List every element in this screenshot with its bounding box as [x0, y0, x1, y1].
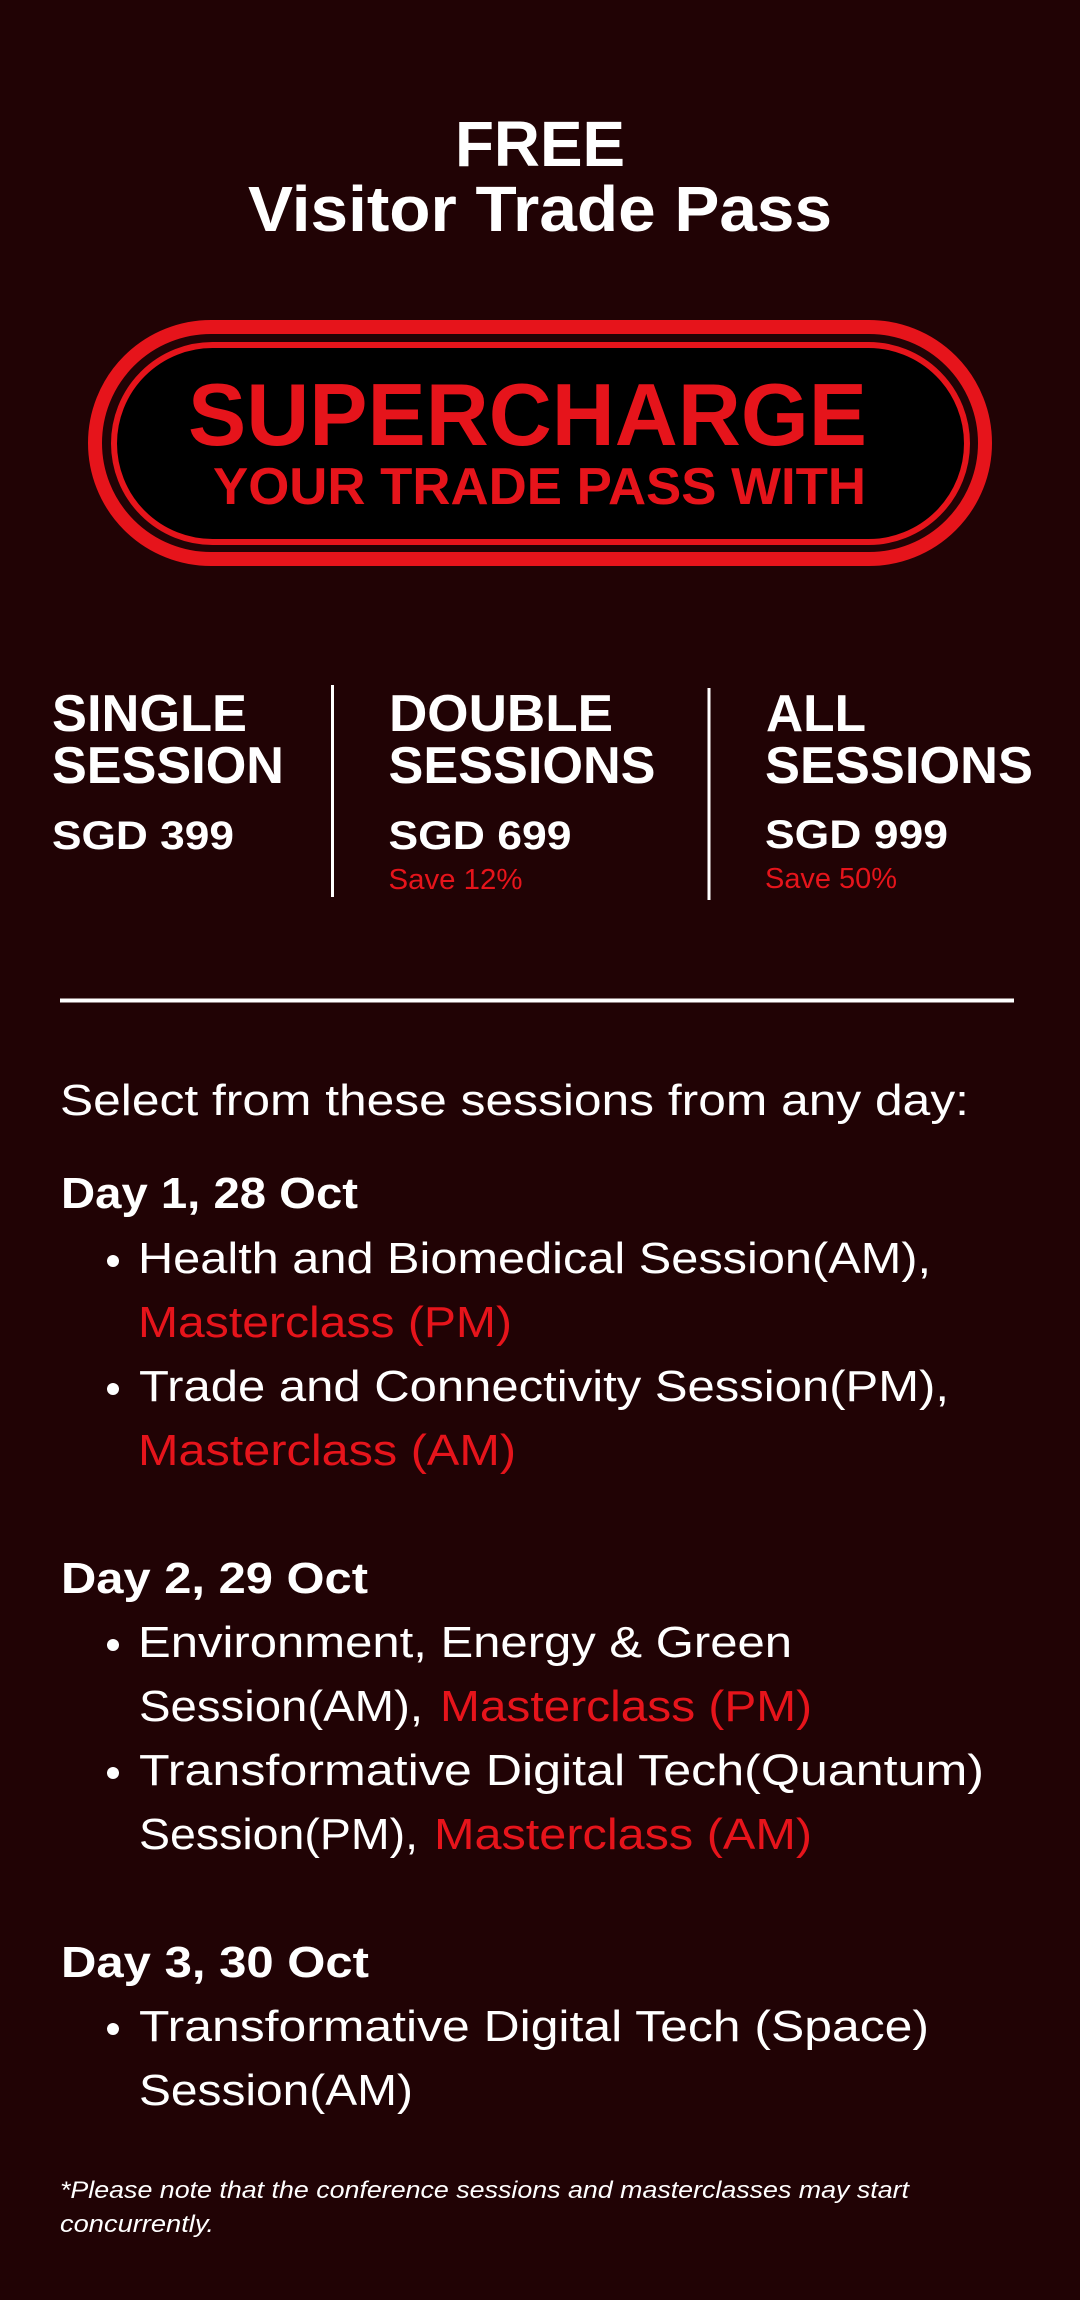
title: FREE Visitor Trade Pass [248, 108, 832, 245]
day 2 session 1 [138, 1618, 812, 1731]
pill inner ring with black fill [114, 345, 967, 542]
day 2 session 1: Session(AM), [139, 1682, 423, 1731]
pricing column: double sessions: DOUBLE [389, 685, 613, 743]
day 2 block [61, 1554, 984, 1859]
banner: supercharge pill [95, 327, 985, 559]
divider between single and double [331, 685, 334, 897]
pricing column: all sessions [765, 685, 1033, 895]
footnote: concurrently. [60, 2211, 214, 2238]
saving: 12%: Save 12% [388, 864, 522, 896]
pricing column: single session [52, 685, 284, 858]
pricing column: double sessions [388, 685, 656, 896]
banner heading: SUPERCHARGE [188, 365, 867, 464]
horizontal rule [60, 998, 1014, 1002]
pricing column: all sessions: SESSIONS [765, 737, 1033, 795]
bullet [107, 1639, 119, 1651]
pricing column: single session: SESSION [52, 737, 284, 795]
divider between double and all [708, 688, 710, 900]
day 3 session [139, 2002, 929, 2115]
day 1 session 1: Masterclass (PM) [138, 1298, 512, 1347]
day 3 block [61, 1938, 929, 2115]
saving: 50%: Save 50% [765, 863, 897, 895]
pricing column: double sessions: SESSIONS [388, 737, 656, 795]
day 2 session 2 [139, 1746, 984, 1859]
pricing column: double sessions: SGD 699 [388, 814, 572, 858]
pricing column: single session: SGD 399 [52, 814, 234, 858]
bullet [107, 2023, 119, 2035]
day 3 session: Transformative Digital Tech (Space) [139, 2002, 929, 2051]
intro text: Select from these sessions from any day: [60, 1076, 969, 1125]
title: FREE Visitor Trade Pass: Visitor Trade Pass [248, 173, 832, 245]
pricing column: single session: SINGLE [52, 685, 247, 743]
banner subheading: YOUR TRADE PASS WITH [213, 458, 866, 516]
day 2 heading: Day 2, 29 Oct [61, 1554, 368, 1603]
bullet [107, 1383, 119, 1395]
day 1 block [61, 1169, 949, 1475]
day 3 session: Session(AM) [139, 2066, 413, 2115]
pricing column: all sessions: ALL [766, 685, 866, 743]
bullet [107, 1255, 119, 1267]
pill outer ring [95, 327, 985, 559]
day 1 session 2: Masterclass (AM) [138, 1426, 516, 1475]
day 1 session 1: Health and Biomedical Session(AM), [138, 1234, 931, 1283]
title: FREE Visitor Trade Pass: FREE [455, 108, 625, 180]
day 2 session 2: Transformative Digital Tech(Quantum) [139, 1746, 984, 1795]
footnote: *Please note that the conference sessions and masterclasses may start [60, 2177, 910, 2204]
day 2 session 1: Masterclass (PM) [440, 1682, 812, 1731]
day 2 session 2: Masterclass (AM) [434, 1810, 812, 1859]
day 1 session 1 [138, 1234, 931, 1347]
footnote [60, 2177, 910, 2238]
bullet [107, 1767, 119, 1779]
day 2 session 1: Environment, Energy & Green [138, 1618, 792, 1667]
day 1 session 2: Trade and Connectivity Session(PM), [139, 1362, 949, 1411]
day 2 session 2: Session(PM), [139, 1810, 418, 1859]
pricing column: all sessions: SGD 999 [765, 813, 948, 857]
day 1 session 2 [138, 1362, 949, 1475]
day 1 heading: Day 1, 28 Oct [61, 1169, 358, 1218]
day 3 heading: Day 3, 30 Oct [61, 1938, 369, 1987]
